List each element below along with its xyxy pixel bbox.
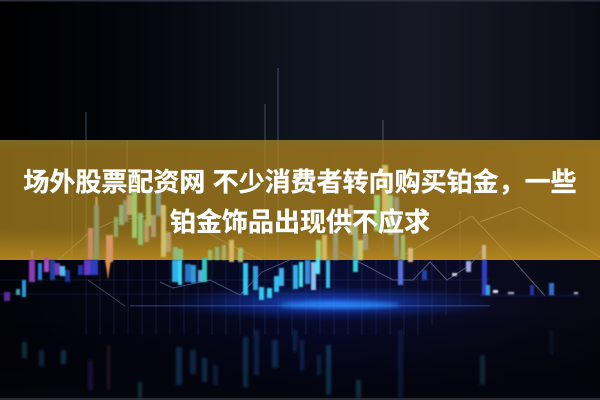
blue glow streak: [130, 285, 500, 321]
grid lines lower area: [0, 260, 490, 335]
upper thin wicks: [86, 68, 383, 140]
title: [23, 167, 577, 237]
title: 场外股票配资网 不少消费者转向购买铂金，一些: [23, 167, 577, 197]
trend lines lower: [88, 280, 125, 306]
candlesticks lower: [4, 258, 580, 301]
gold title band: [0, 140, 600, 260]
faint reflection of candlesticks: [22, 330, 553, 398]
title: 铂金饰品出现供不应求: [170, 207, 430, 237]
candlesticks inside band: [31, 165, 486, 262]
